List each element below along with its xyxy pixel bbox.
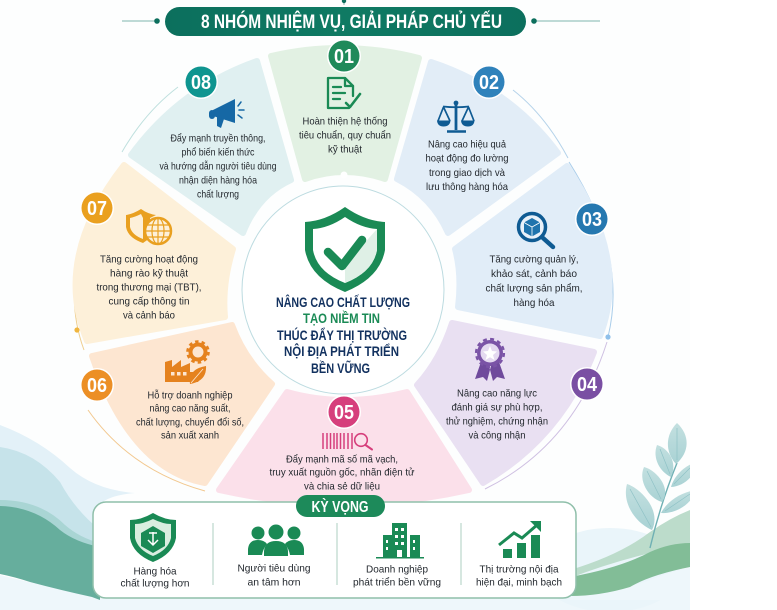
text 03 bbox=[486, 254, 582, 309]
text 03: hàng hóa bbox=[514, 298, 555, 309]
text 08: Đẩy mạnh truyền thông, bbox=[170, 132, 266, 144]
badge 03 bbox=[575, 202, 609, 236]
central text: NÂNG CAO CHẤT LƯỢNG bbox=[276, 293, 410, 310]
text: market: Thị trường nội địa bbox=[480, 564, 559, 576]
icon: shield and globe bbox=[126, 209, 171, 244]
text 03: Tăng cường quản lý, bbox=[490, 254, 578, 266]
text 06: Hỗ trợ doanh nghiệp bbox=[148, 388, 233, 402]
badge 05: 05 bbox=[334, 402, 354, 424]
badge 05 bbox=[327, 395, 361, 429]
text 08: nhận diện hàng hóa bbox=[179, 176, 257, 186]
text 03: khảo sát, cảnh báo bbox=[491, 269, 577, 280]
icon: growth chart bbox=[499, 521, 541, 558]
text 07: và cảnh báo bbox=[123, 310, 175, 322]
badge 04 bbox=[570, 367, 604, 401]
text 08 bbox=[160, 132, 277, 200]
badge 08 bbox=[184, 65, 218, 99]
outer ring lines bbox=[74, 87, 613, 491]
icon: people bbox=[248, 524, 304, 556]
text 05: Đẩy mạnh mã số mã vạch, bbox=[286, 454, 398, 466]
badge 06 bbox=[80, 368, 114, 402]
text 06: chất lượng, chuyển đổi số, bbox=[136, 416, 244, 428]
text: businesses: Doanh nghiệp bbox=[366, 564, 428, 576]
text 02: lưu thông hàng hóa bbox=[426, 182, 508, 193]
panel 01 bbox=[271, 39, 419, 179]
text: consumers: Người tiêu dùng bbox=[238, 564, 311, 574]
text 02: trong giao dịch và bbox=[429, 168, 505, 179]
panel 08 bbox=[131, 61, 291, 233]
text 01: Hoàn thiện hệ thống bbox=[302, 116, 388, 128]
central circle bbox=[242, 186, 444, 394]
badge 06: 06 bbox=[87, 375, 107, 397]
icon: barcode search bbox=[323, 433, 372, 450]
badge 07 bbox=[80, 191, 114, 225]
icon: shield check bbox=[305, 207, 385, 292]
panel 04 bbox=[417, 323, 604, 483]
icon: rosette bbox=[475, 339, 505, 381]
text 07 bbox=[96, 254, 202, 322]
decorative connectors of the title bbox=[122, 0, 600, 24]
badge 03: 03 bbox=[582, 209, 602, 231]
text 04: Nâng cao năng lực bbox=[457, 388, 537, 400]
heading: expectations: KỲ VỌNG bbox=[312, 497, 368, 516]
panel 07 bbox=[76, 165, 233, 341]
panel 05 bbox=[219, 392, 469, 504]
text 01: tiêu chuẩn, quy chuẩn bbox=[299, 130, 391, 142]
text 01: kỹ thuật bbox=[328, 144, 362, 156]
text: consumers: an tâm hơn bbox=[248, 578, 301, 588]
badge 08: 08 bbox=[191, 72, 211, 94]
panel 03 bbox=[455, 166, 610, 336]
text 07: trong thương mại (TBT), bbox=[96, 282, 202, 294]
background artwork bbox=[0, 423, 690, 610]
text: goods bbox=[120, 566, 190, 590]
text: goods: Hàng hóa bbox=[134, 566, 177, 578]
central text: TẠO NIỀM TIN bbox=[303, 310, 380, 326]
text 02: hoạt động đo lường bbox=[426, 154, 509, 164]
panel: expectations bbox=[93, 495, 576, 598]
icon: shield goods bbox=[130, 513, 176, 562]
leaf branch bbox=[626, 423, 696, 548]
text 06: nâng cao năng suất, bbox=[150, 402, 230, 414]
central text: BỀN VỮNG bbox=[311, 359, 370, 376]
text 05: và chia sẻ dữ liệu bbox=[304, 482, 380, 492]
text 07: Tăng cường hoạt động bbox=[100, 254, 198, 266]
text 06: sản xuất xanh bbox=[161, 430, 219, 442]
badge 02 bbox=[472, 65, 506, 99]
badge 01: 01 bbox=[334, 46, 354, 68]
central text: THÚC ĐẨY THỊ TRƯỜNG bbox=[277, 326, 407, 343]
text 04: và công nhận bbox=[468, 430, 526, 442]
text: market bbox=[476, 564, 562, 588]
text 08: và hướng dẫn người tiêu dùng bbox=[160, 160, 277, 172]
text 04: đánh giá sự phù hợp, bbox=[452, 402, 542, 414]
icon: magnifier with box bbox=[518, 214, 553, 247]
text 04 bbox=[446, 388, 548, 442]
central text bbox=[276, 293, 410, 376]
central text: NỘI ĐỊA PHÁT TRIỂN bbox=[284, 342, 399, 359]
title: 8 NHÓM NHIỆM VỤ, GIẢI PHÁP CHỦ YẾU bbox=[201, 11, 502, 33]
text 07: hàng rào kỹ thuật bbox=[110, 268, 188, 280]
badge 01 bbox=[327, 39, 361, 73]
text 02: Nâng cao hiệu quả bbox=[428, 140, 506, 150]
badge 07: 07 bbox=[87, 198, 107, 220]
title bbox=[165, 7, 526, 36]
panel 06 bbox=[80, 325, 272, 483]
text 03: chất lượng sản phẩm, bbox=[486, 282, 582, 294]
text: consumers bbox=[238, 564, 311, 588]
panel 02 bbox=[397, 62, 558, 233]
text: market: hiện đại, minh bạch bbox=[476, 578, 562, 588]
text: goods: chất lượng hơn bbox=[120, 578, 190, 590]
icon: buildings bbox=[376, 523, 424, 558]
text 08: chất lượng bbox=[197, 188, 239, 200]
badge 04: 04 bbox=[577, 374, 598, 396]
text 02 bbox=[426, 140, 509, 193]
text: businesses bbox=[353, 564, 441, 588]
icon: document check bbox=[328, 78, 360, 108]
icon: megaphone bbox=[209, 99, 244, 128]
text: businesses: phát triển bền vững bbox=[353, 576, 441, 588]
text 01 bbox=[299, 116, 391, 156]
text 06 bbox=[136, 388, 244, 442]
text 08: phổ biến kiến thức bbox=[182, 146, 254, 158]
icon: factory gear leaf bbox=[165, 342, 208, 384]
text 05: truy xuất nguồn gốc, nhãn điện tử bbox=[270, 466, 415, 478]
text 05 bbox=[270, 454, 415, 492]
text 04: thử nghiệm, chứng nhận bbox=[446, 416, 548, 428]
badge 02: 02 bbox=[479, 72, 499, 94]
heading: expectations bbox=[296, 495, 385, 517]
icon: scales bbox=[437, 101, 474, 132]
text 07: cung cấp thông tin bbox=[108, 296, 190, 308]
